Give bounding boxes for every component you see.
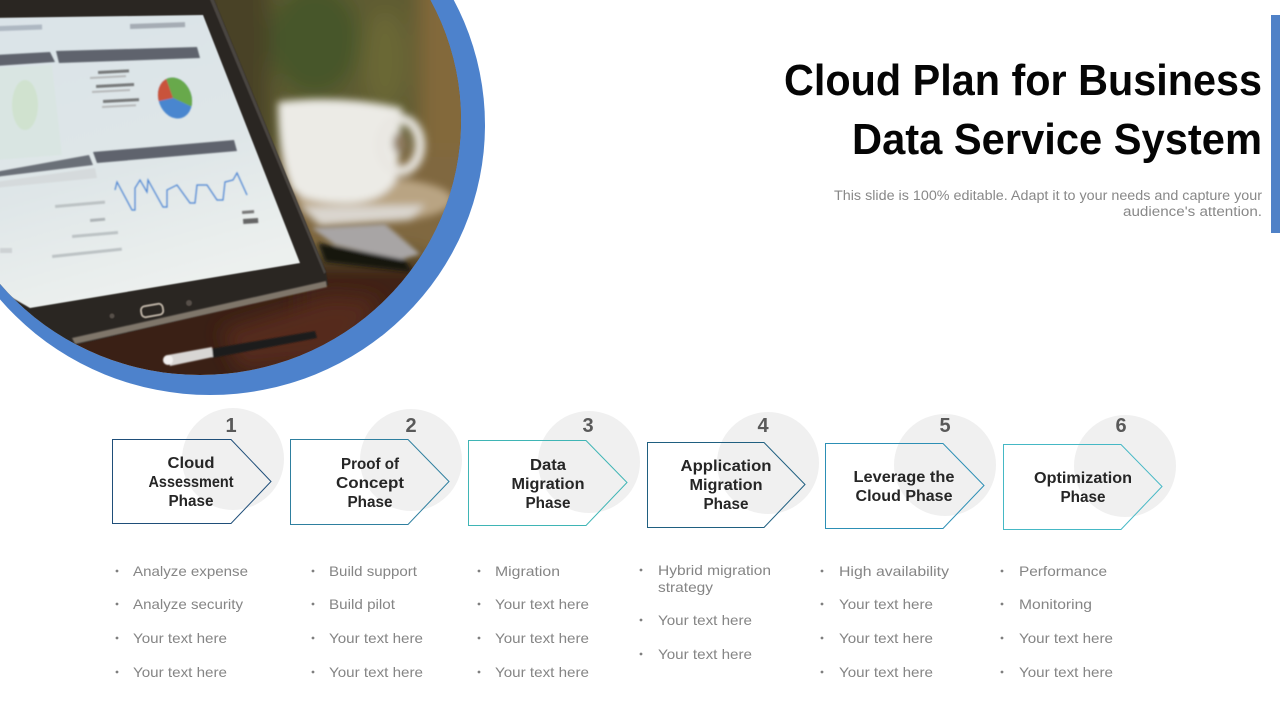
photo: tablet with analytics dashboard in blue ring — [0, 0, 500, 402]
pen — [163, 331, 317, 366]
subtitle: This slide is 100% editable. Adapt it to your needs and capture your — [834, 188, 1263, 203]
step 6: Optimization Phase: 6 — [1115, 415, 1127, 437]
step 4: Application Migration Phase: Application — [680, 458, 772, 475]
step 3: Data Migration Phase: Phase — [526, 495, 571, 512]
step 5: Leverage the Cloud Phase: Cloud Phase — [856, 488, 953, 505]
dashboard — [0, 22, 258, 258]
step 4: Application Migration Phase: Phase — [704, 496, 749, 513]
title: Data Service System — [852, 115, 1262, 164]
step 1: Cloud Assessment Phase: Phase — [168, 493, 214, 510]
list: Cloud Assessment Phase: Your text here — [133, 630, 227, 646]
list: Data Migration Phase — [478, 563, 589, 680]
step 3: Data Migration Phase — [468, 411, 640, 526]
list: Optimization Phase: Performance — [1019, 563, 1107, 579]
photograph scene — [0, 0, 461, 375]
list: Optimization Phase: Your text here — [1019, 630, 1113, 646]
step 3: Data Migration Phase: Migration — [512, 476, 584, 493]
list: Proof of Concept Phase: Build pilot — [329, 596, 395, 612]
phone on table — [312, 224, 420, 272]
list: Application Migration Phase: Hybrid migration — [658, 562, 771, 578]
line chart — [115, 173, 247, 210]
list: Optimization Phase — [1001, 563, 1113, 680]
tablet screen — [0, 15, 300, 308]
top small header — [130, 22, 185, 29]
home button — [110, 300, 192, 318]
step 4: Application Migration Phase — [648, 412, 819, 528]
step 3: Data Migration Phase: Data — [530, 457, 566, 474]
subtitle: audience's attention. — [1123, 204, 1262, 219]
step 1: Cloud Assessment Phase — [112, 408, 284, 524]
blue ring — [0, 0, 485, 395]
list: Optimization Phase: Monitoring — [1019, 596, 1092, 612]
list: Leverage the Cloud Phase: Your text here — [839, 630, 933, 646]
list: Optimization Phase: Your text here — [1019, 664, 1113, 680]
step 2: Proof of Concept Phase: Proof of — [341, 456, 400, 473]
step 5: Leverage the Cloud Phase — [826, 414, 996, 528]
title — [784, 56, 1262, 164]
saucer and cup — [278, 99, 453, 226]
step 2: Proof of Concept Phase: 2 — [405, 415, 417, 437]
list: Data Migration Phase: Your text here — [495, 630, 589, 646]
blurred background — [214, 0, 461, 358]
list: Leverage the Cloud Phase — [821, 563, 949, 680]
list: Proof of Concept Phase: Your text here — [329, 664, 423, 680]
step 2: Proof of Concept Phase: Phase — [348, 494, 393, 511]
step 6: Optimization Phase: Optimization — [1034, 470, 1132, 487]
list: Proof of Concept Phase — [312, 563, 423, 680]
legend text — [90, 69, 139, 108]
list: Cloud Assessment Phase — [116, 563, 248, 680]
list: Application Migration Phase — [640, 562, 771, 662]
list: Application Migration Phase: Your text here — [658, 612, 752, 628]
pie chart — [157, 76, 193, 120]
list: Data Migration Phase: Your text here — [495, 664, 589, 680]
table rows — [55, 201, 105, 208]
subtitle — [834, 188, 1263, 219]
step 4: Application Migration Phase: Migration — [690, 477, 762, 494]
list: Application Migration Phase: Your text here — [658, 646, 752, 662]
list: Data Migration Phase: Your text here — [495, 596, 589, 612]
list: Leverage the Cloud Phase: High availability — [839, 563, 949, 579]
title: Cloud Plan for Business — [784, 56, 1262, 105]
accent bar — [1271, 15, 1280, 233]
list: Cloud Assessment Phase: Your text here — [133, 664, 227, 680]
list: Leverage the Cloud Phase: Your text here — [839, 664, 933, 680]
step 4: Application Migration Phase: 4 — [757, 415, 769, 437]
step 2: Proof of Concept Phase — [290, 409, 462, 524]
list: Application Migration Phase: strategy — [658, 579, 713, 595]
tablet body — [0, 0, 328, 345]
step 5: Leverage the Cloud Phase: Leverage the — [854, 469, 955, 486]
step 6: Optimization Phase — [1004, 415, 1176, 530]
list: Cloud Assessment Phase: Analyze security — [133, 596, 243, 612]
step 2: Proof of Concept Phase: Concept — [336, 475, 405, 492]
step 1: Cloud Assessment Phase: Cloud — [168, 455, 214, 472]
list: Data Migration Phase: Migration — [495, 563, 560, 579]
list: Proof of Concept Phase: Your text here — [329, 630, 423, 646]
list: Cloud Assessment Phase: Analyze expense — [133, 563, 248, 579]
table reflection — [220, 295, 380, 370]
list: Leverage the Cloud Phase: Your text here — [839, 596, 933, 612]
list: Proof of Concept Phase: Build support — [329, 563, 417, 579]
step 1: Cloud Assessment Phase: Assessment — [148, 474, 234, 491]
step 3: Data Migration Phase: 3 — [582, 415, 594, 437]
step 1: Cloud Assessment Phase: 1 — [225, 415, 237, 437]
step 5: Leverage the Cloud Phase: 5 — [939, 415, 951, 437]
step 6: Optimization Phase: Phase — [1060, 489, 1106, 506]
